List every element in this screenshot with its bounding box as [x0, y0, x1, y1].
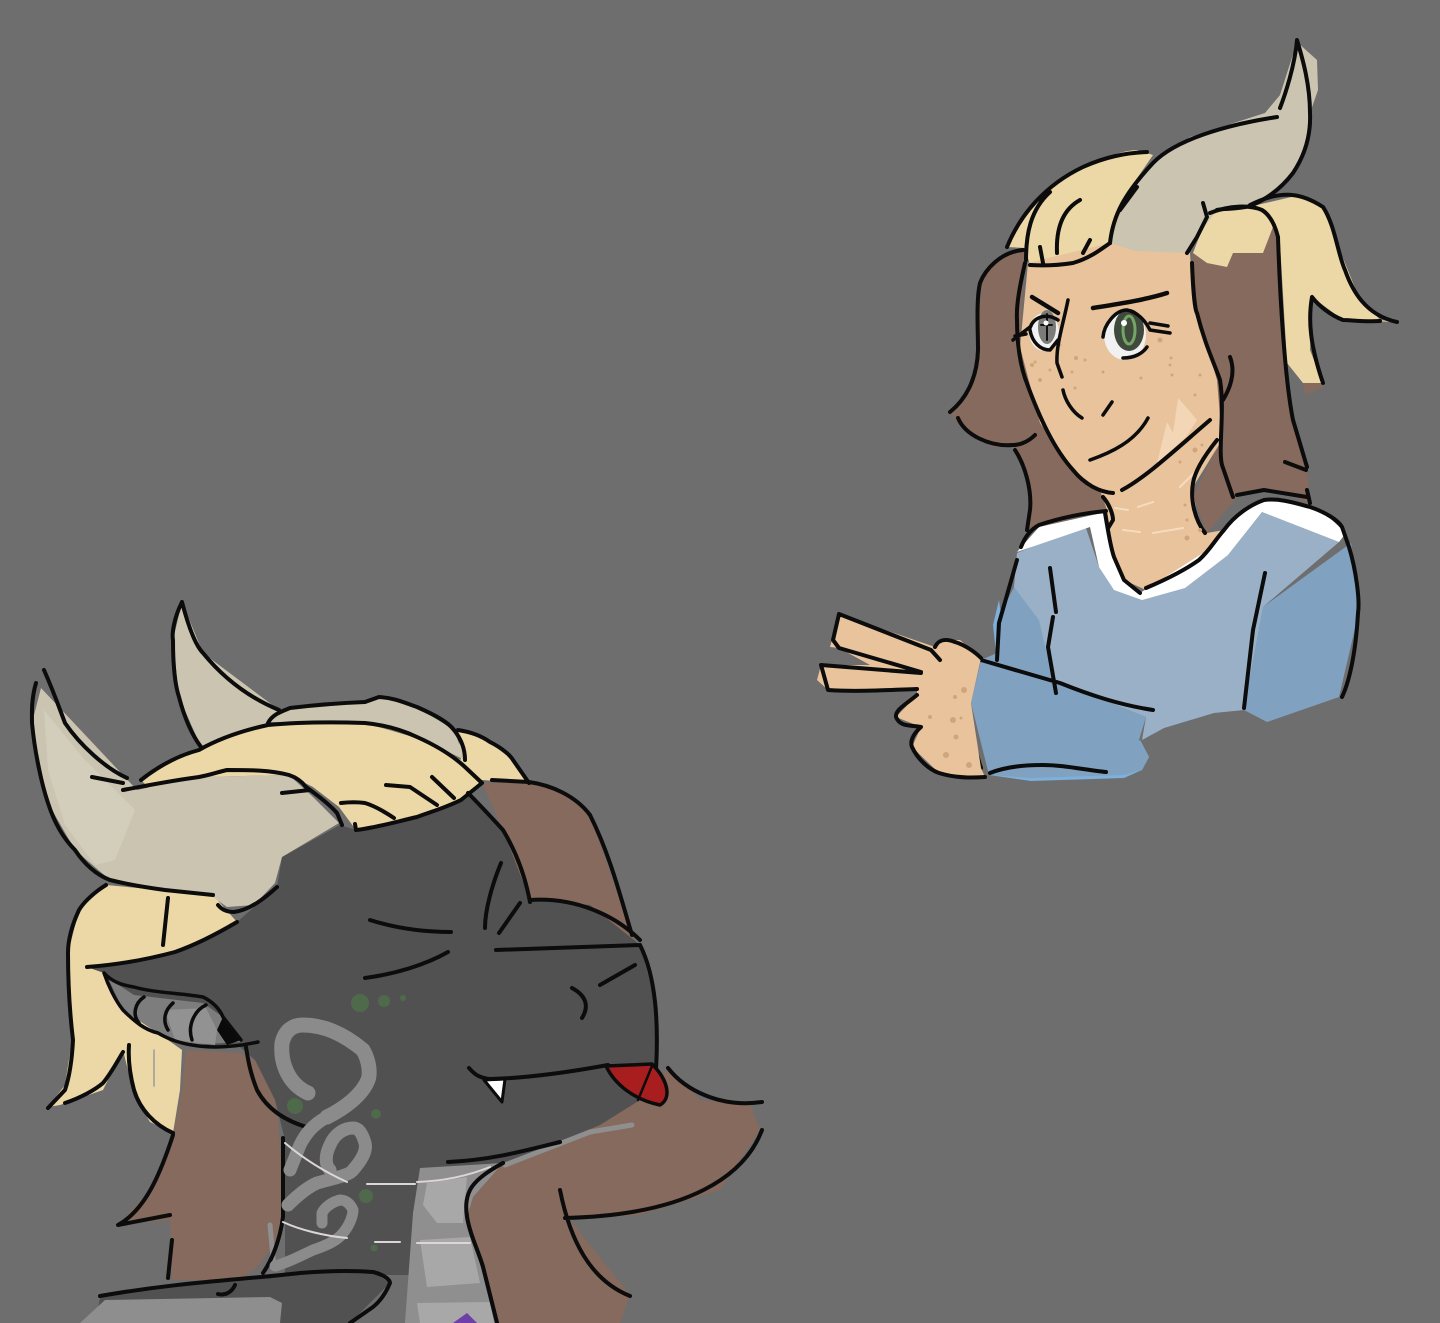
- neck plates: [405, 1163, 503, 1323]
- dragon head: [87, 795, 655, 1275]
- hair top outlines: [141, 697, 529, 830]
- back horn: [173, 602, 279, 747]
- nose and mouth: [1057, 300, 1148, 460]
- swirl markings: [275, 1025, 369, 1266]
- jaw shadow: [270, 1125, 632, 1268]
- horn cap on head: [268, 697, 465, 760]
- hand with two fingers: [817, 614, 985, 778]
- shirt: [968, 498, 1360, 781]
- brown hair outlines: [118, 780, 762, 1323]
- blonde hair: [1007, 150, 1397, 383]
- face and neck: [1020, 243, 1224, 590]
- hair outlines: [950, 152, 1397, 533]
- white scale lines: [283, 1143, 490, 1243]
- right eye: [1103, 309, 1170, 360]
- face outline and jaw: [1017, 263, 1210, 493]
- human character bust: [817, 40, 1397, 781]
- back hair brown: [950, 227, 1310, 533]
- shirt collar: [1017, 498, 1346, 600]
- wing shoulder: [80, 1271, 390, 1323]
- face wrinkle lines: [365, 863, 657, 1162]
- brown hair: [118, 782, 760, 1323]
- green spots: [287, 994, 406, 1252]
- shirt outlines: [968, 500, 1359, 773]
- side horn: [32, 670, 342, 912]
- eyebrows: [1032, 293, 1167, 313]
- neck lines: [1115, 470, 1197, 533]
- blonde hair side: [48, 885, 237, 1133]
- dragon character: [32, 602, 762, 1323]
- horn: [1110, 40, 1318, 253]
- blonde side outlines: [48, 885, 237, 1133]
- mouth with fang and tongue: [469, 1064, 667, 1105]
- eye: [104, 973, 258, 1047]
- blonde hair top: [141, 723, 529, 830]
- left eye: [1013, 310, 1059, 351]
- scar highlight: [1157, 398, 1197, 463]
- freckles: [1030, 338, 1204, 540]
- purple mark: [453, 1313, 477, 1323]
